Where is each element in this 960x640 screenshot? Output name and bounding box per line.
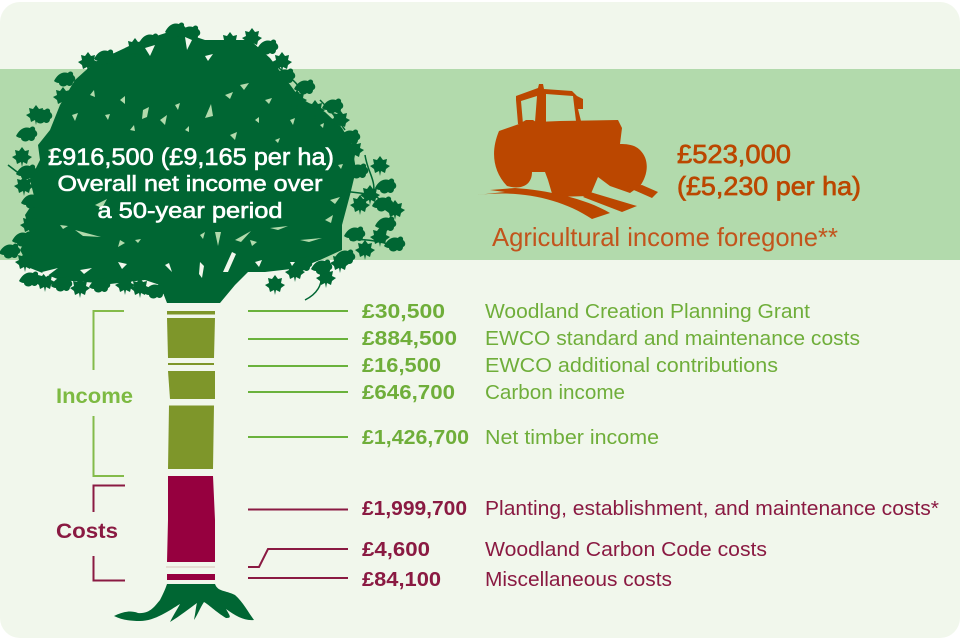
income rows: EWCO standard and maintenance costs bbox=[485, 328, 860, 350]
tree roots bbox=[114, 584, 254, 622]
overall net income text: a 50-year period bbox=[98, 198, 282, 223]
cost rows: £84,100 bbox=[362, 569, 441, 591]
income rows: Net timber income bbox=[485, 427, 659, 449]
cost rows: Miscellaneous costs bbox=[485, 569, 672, 591]
agricultural income label: Agricultural income foregone** bbox=[492, 222, 838, 252]
income rows: £30,500 bbox=[362, 301, 445, 323]
income rows: £646,700 bbox=[362, 382, 455, 404]
income bracket bbox=[94, 311, 124, 476]
cost rows: £4,600 bbox=[362, 539, 430, 561]
agricultural income figure: (£5,230 per ha) bbox=[677, 171, 861, 201]
costs bracket bbox=[94, 486, 125, 580]
income label: Income bbox=[56, 385, 133, 408]
income rows: EWCO additional contributions bbox=[485, 355, 778, 377]
income rows: Woodland Creation Planning Grant bbox=[485, 301, 810, 323]
leader lines bbox=[248, 311, 348, 578]
income rows bbox=[362, 301, 860, 449]
cost rows bbox=[362, 498, 939, 591]
overall net income text bbox=[48, 144, 334, 223]
income rows: Carbon income bbox=[485, 382, 625, 404]
costs label: Costs bbox=[56, 520, 118, 543]
agricultural income band bbox=[0, 69, 960, 260]
overall net income text: Overall net income over bbox=[58, 171, 322, 196]
cost rows: £1,999,700 bbox=[362, 498, 467, 520]
thin cost band bbox=[166, 566, 215, 568]
cost segments bbox=[167, 476, 215, 580]
cost rows: Woodland Carbon Code costs bbox=[485, 539, 767, 561]
agricultural income figure: £523,000 bbox=[677, 139, 791, 169]
income segments bbox=[167, 311, 215, 469]
income rows: £16,500 bbox=[362, 355, 441, 377]
income rows: £884,500 bbox=[362, 328, 457, 350]
tree canopy bbox=[0, 23, 405, 303]
icon: tractor bbox=[478, 84, 658, 219]
trunk segments bbox=[167, 311, 215, 580]
agricultural income figure bbox=[677, 139, 861, 201]
trunk top bbox=[167, 290, 216, 303]
income rows: £1,426,700 bbox=[362, 427, 469, 449]
overall net income text: £916,500 (£9,165 per ha) bbox=[48, 144, 334, 171]
cost rows: Planting, establishment, and maintenance costs* bbox=[485, 498, 939, 520]
